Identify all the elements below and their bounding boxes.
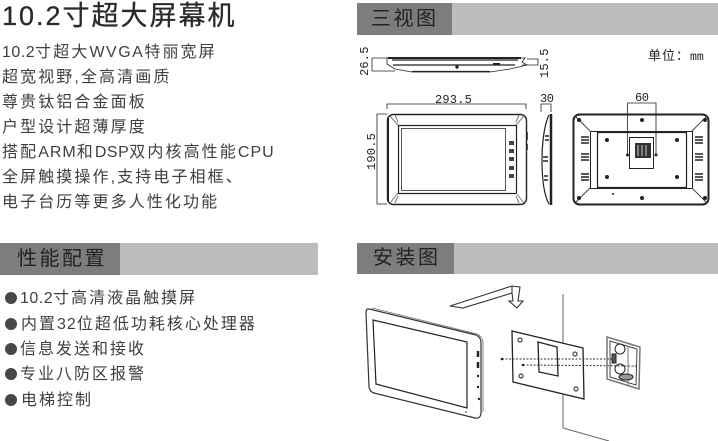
heading: performance configuration: 性能配置 xyxy=(17,248,107,270)
feature description list: 全屏触摸操作,支持电子相框、 xyxy=(2,169,244,186)
dimension: 15.5: 15.5 xyxy=(538,48,552,78)
dimension: 190.5: 190.5 xyxy=(365,133,379,170)
vents xyxy=(581,137,703,180)
heading: performance configuration xyxy=(0,243,318,275)
unit label: 单位：mm xyxy=(648,48,704,64)
install drawing: wall box xyxy=(607,337,640,389)
dimension: 26.5: 26.5 xyxy=(358,46,372,76)
dimension: 293.5: 293.5 xyxy=(435,93,472,107)
install drawing: mounting plate xyxy=(512,331,584,399)
performance bullet list: 信息发送和接收 xyxy=(20,341,146,358)
install drawing: dashed screw lines xyxy=(501,358,637,366)
performance bullet list: 电梯控制 xyxy=(21,392,93,409)
heading: three views: 三视图 xyxy=(371,8,438,30)
feature description list: 户型设计超薄厚度 xyxy=(2,119,147,136)
mounting connector xyxy=(635,143,651,158)
feature description list: 超宽视野,全高清画质 xyxy=(2,69,171,86)
performance bullet list: 内置32位超低功耗核心处理器 xyxy=(21,316,257,333)
front panel buttons xyxy=(509,141,514,178)
heading: installation diagram xyxy=(357,243,718,274)
top view drawing xyxy=(358,46,552,78)
screws xyxy=(577,118,707,200)
dimension: 60: 60 xyxy=(635,91,649,105)
title: 10.2寸超大屏幕机 xyxy=(2,1,237,31)
heading: three views xyxy=(357,3,718,35)
feature description list: 尊贵钛铝合金面板 xyxy=(2,94,147,111)
install drawing: wall line xyxy=(563,294,609,441)
heading: installation diagram: 安装图 xyxy=(373,247,440,269)
feature description list: 电子台历等更多人性化功能 xyxy=(2,194,219,211)
install drawing: bent arrow xyxy=(450,286,523,308)
performance bullet list: 专业八防区报警 xyxy=(20,366,146,383)
performance bullet list: 10.2寸高清液晶触摸屏 xyxy=(20,290,197,307)
front view drawing xyxy=(365,93,527,204)
dimension: 30: 30 xyxy=(540,92,554,106)
feature description list: 搭配ARM和DSP双内核高性能CPU xyxy=(2,144,275,161)
side view drawing xyxy=(540,92,554,205)
feature description list: 10.2寸超大WVGA特丽宽屏 xyxy=(2,44,217,61)
performance bullet list xyxy=(5,289,257,409)
feature description list xyxy=(2,43,275,211)
back view drawing xyxy=(574,91,708,204)
install drawing: tablet xyxy=(366,308,483,418)
